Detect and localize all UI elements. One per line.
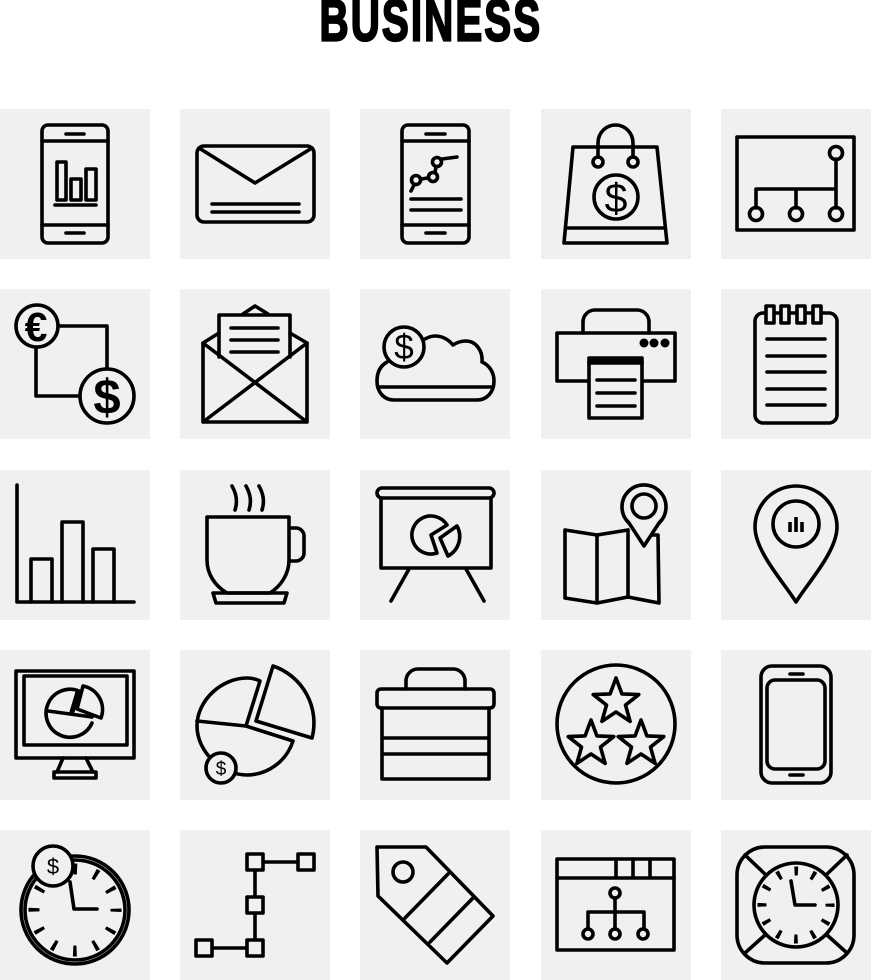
panel: presentation board	[360, 470, 510, 620]
icon: cloud with dollar coin	[377, 327, 494, 400]
icon: pie chart with dollar coin	[197, 666, 314, 783]
icon: open envelope with letter	[203, 306, 307, 422]
icon: pie chart with dollar coin: $	[216, 759, 227, 780]
icon: euro dollar exchange	[16, 304, 134, 425]
panel: location pin	[721, 470, 871, 620]
icon: presentation board with pie chart	[377, 488, 494, 601]
icon: price tag	[377, 847, 493, 963]
icon: location pin with bars	[755, 486, 837, 602]
icon: bar chart	[17, 485, 134, 602]
panel: currency exchange	[0, 289, 150, 439]
panel: phone with line chart	[360, 109, 510, 259]
icon: steaming cup	[207, 486, 304, 603]
icon: shopping bag with dollar	[564, 125, 667, 243]
panel: printer	[541, 289, 691, 439]
icon: clock with dollar coin	[21, 846, 129, 964]
icon: spiral notepad	[755, 306, 837, 423]
icon: phone with bar chart	[42, 125, 108, 243]
icon: smartphone	[761, 666, 831, 783]
icon: three stars in circle	[557, 665, 675, 783]
panel: open envelope	[180, 289, 330, 439]
panel: shopping bag	[541, 109, 691, 259]
icon: vector path nodes	[196, 854, 314, 956]
icon: phone with line chart	[402, 125, 469, 243]
icon: euro dollar exchange: $	[93, 371, 121, 425]
icon: browser window with hierarchy	[557, 859, 674, 950]
icon: shopping bag with dollar: $	[605, 175, 628, 221]
panel: clock with dollar	[0, 830, 150, 980]
icon: cloud with dollar coin: $	[394, 328, 414, 367]
icon: monitor with pie chart	[16, 671, 134, 778]
icon: euro dollar exchange: €	[25, 304, 48, 350]
panel: phone with bar chart	[0, 109, 150, 259]
panel: smartphone	[721, 650, 871, 800]
panel: sealed envelope	[180, 109, 330, 259]
panel: notepad	[721, 289, 871, 439]
panel: coffee cup	[180, 470, 330, 620]
panel: toolbox	[360, 650, 510, 800]
panel: vector nodes	[180, 830, 330, 980]
panel: map with pin	[541, 470, 691, 620]
panel: pie chart with dollar	[180, 650, 330, 800]
panel: three star rating	[541, 650, 691, 800]
panel: cloud with dollar	[360, 289, 510, 439]
panel: board with hierarchy	[721, 109, 871, 259]
panel: monitor with pie chart	[0, 650, 150, 800]
icon: folded map with pin	[565, 485, 666, 603]
panel: price tag	[360, 830, 510, 980]
icon: sealed envelope	[197, 146, 314, 222]
panel: framed clock	[721, 830, 871, 980]
panel: browser with hierarchy	[541, 830, 691, 980]
icon: toolbox	[377, 669, 494, 779]
icon: clock with dollar coin: $	[47, 854, 59, 879]
icon: rounded frame with clock	[737, 847, 854, 963]
icon: board with hierarchy	[737, 137, 854, 230]
icon: printer	[557, 310, 675, 418]
panel: bar chart	[0, 470, 150, 620]
